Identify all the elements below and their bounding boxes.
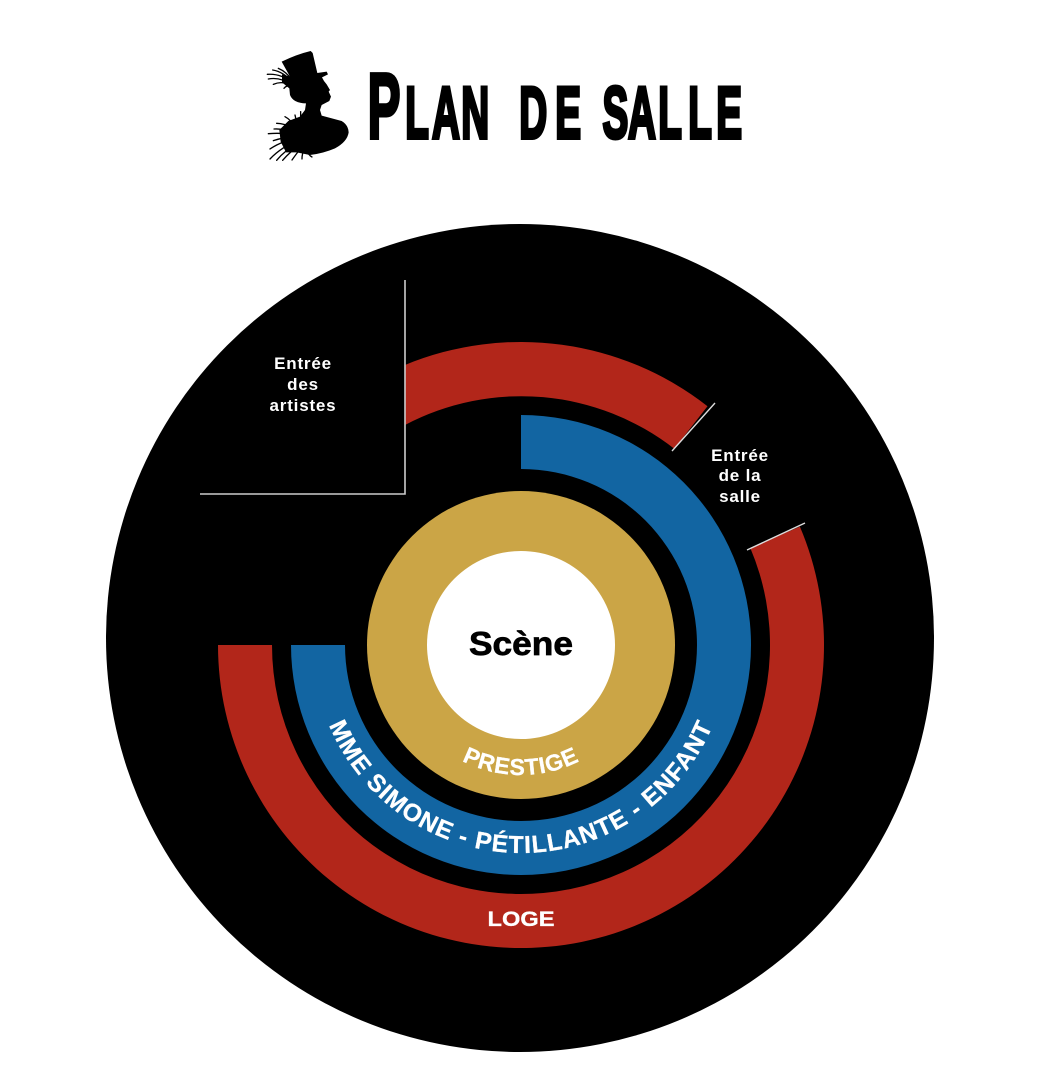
room entrance upper divider line [672,403,715,451]
label: room entrance: de la [719,466,761,485]
label: prestige: PRESTIGE [463,746,579,776]
label: artists entrance: artistes [270,396,336,415]
panel: loge upper red arc [405,342,708,449]
panel: stage white disc [427,551,615,739]
label: room entrance: Entrée [711,446,769,465]
panel: loge lower red arc [218,527,824,948]
title: P [368,54,400,158]
label: blue categories: MME SIMONE - PÉTILLANTE - ENFANT [329,719,710,854]
room entrance lower divider line [747,523,805,550]
label: stage: Scène [469,625,573,662]
panel: prestige gold ring [367,491,675,799]
black circular hall [106,224,934,1052]
title: LANDESALL [405,73,712,154]
label: artists entrance: Entrée [274,354,332,373]
label: room entrance: salle [719,487,761,506]
panel: blue seating arc [291,415,751,875]
title: E [716,73,742,154]
icon: top-hat lady silhouette [267,51,349,160]
label: loge: LOGE [488,908,554,931]
label: artists entrance: des [287,375,319,394]
artists entrance divider lines [200,280,405,494]
